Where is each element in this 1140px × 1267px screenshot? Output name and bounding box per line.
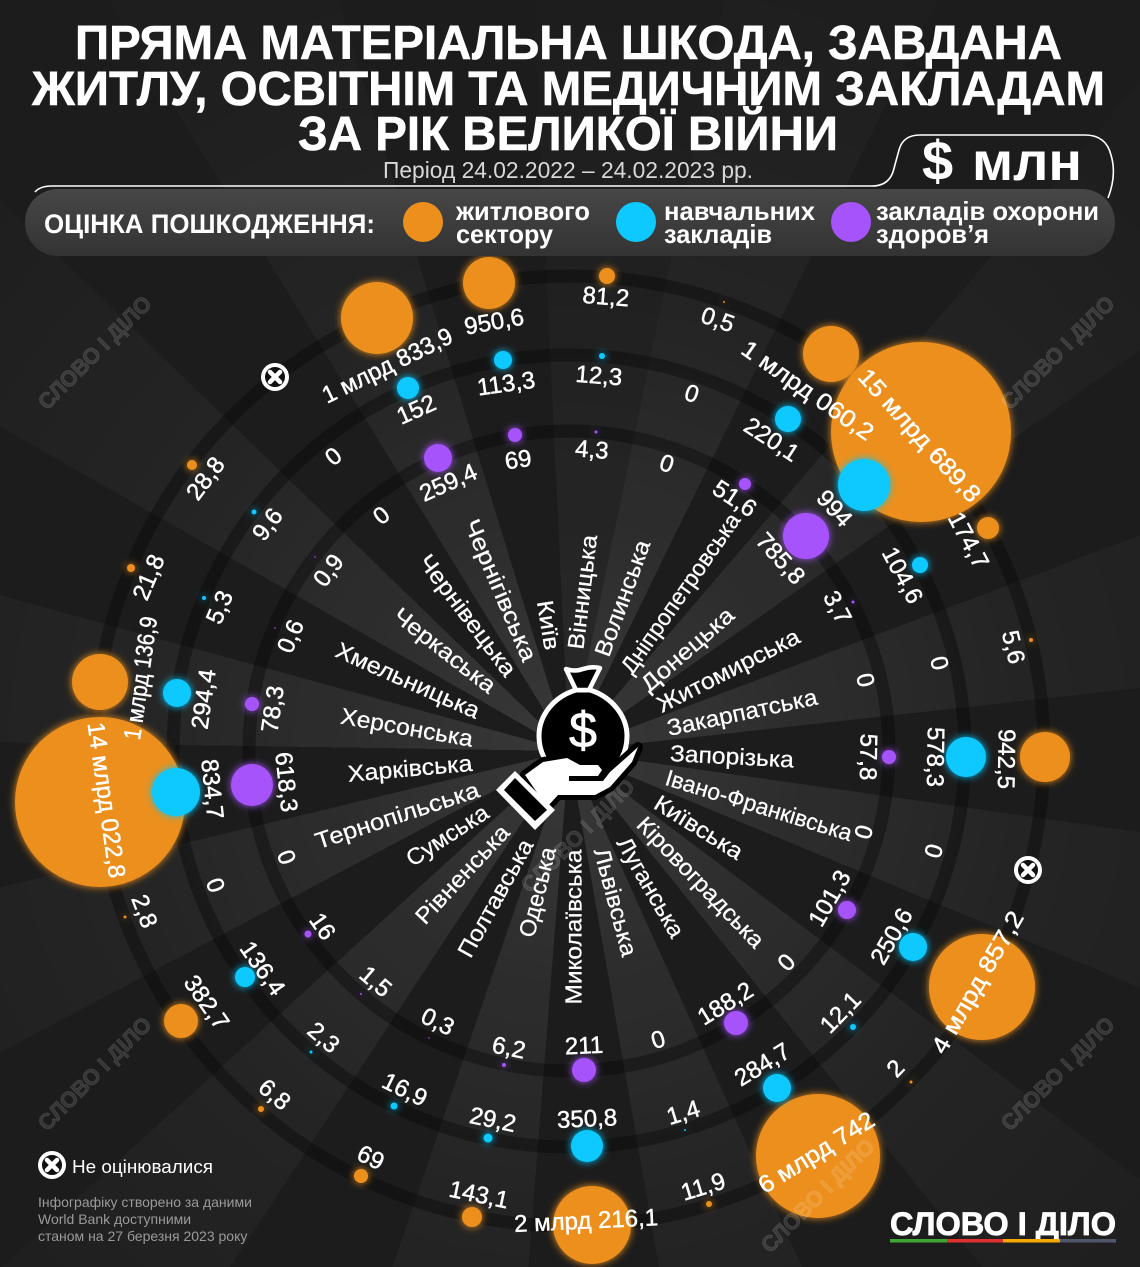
region names: Чернігівська	[459, 515, 542, 665]
watermarks: СЛОВО І ДІЛО	[33, 1012, 157, 1136]
value labels: education: 12,1	[815, 987, 867, 1039]
value labels: education: 1,4	[663, 1095, 703, 1131]
value labels: healthcare: 259,4	[416, 458, 481, 508]
value labels: education: 16,9	[378, 1068, 431, 1112]
region names: Київська	[650, 790, 748, 865]
value labels: education: 5,3	[201, 587, 239, 628]
icon: money bag in hand: $	[569, 702, 597, 758]
value labels: healthcare: 101,3	[803, 866, 857, 931]
value labels: housing: 1 млрд 833,9	[318, 323, 457, 409]
region names: Донецька	[635, 602, 739, 697]
value labels: education: 2,3	[302, 1017, 345, 1059]
value labels: education: 12,3	[575, 361, 623, 391]
value labels: healthcare: 0	[848, 822, 878, 842]
value labels: housing: 950,6	[462, 304, 526, 341]
watermarks: СЛОВО І ДІЛО	[996, 1012, 1120, 1136]
region names: Хмельницька	[332, 637, 484, 724]
legend: housing	[403, 196, 590, 249]
value labels: healthcare: 16	[303, 908, 341, 945]
legend: housing: сектору	[456, 219, 554, 249]
source note: World Bank доступними	[38, 1211, 191, 1227]
period subtitle: Період 24.02.2022 – 24.02.2023 рр.	[383, 157, 753, 183]
value labels: housing: 1 млрд 060,2	[736, 335, 879, 446]
value labels: healthcare: 3,7	[817, 586, 857, 629]
value labels: education: 0	[681, 379, 702, 409]
value labels: housing: 6 млрд 742	[753, 1107, 880, 1199]
value labels: housing: 0,5	[697, 302, 738, 338]
value labels: housing: 21,8	[127, 551, 171, 604]
region names: Черкаська	[388, 602, 501, 698]
value labels: healthcare: 0,9	[308, 549, 350, 592]
value labels: healthcare: 0	[368, 501, 395, 531]
value labels: housing: 69	[353, 1140, 388, 1176]
value labels: education: 578,3	[921, 727, 949, 787]
source note: Інфографіку створено за даними	[38, 1194, 252, 1210]
icon: money bag in hand	[496, 667, 638, 830]
watermarks: СЛОВО І ДІЛО	[33, 291, 157, 415]
value labels: education: 0	[320, 442, 347, 472]
value labels: housing: 2 млрд 216,1	[513, 1204, 659, 1238]
value labels: education: 0	[918, 841, 948, 861]
region names: Рівненська	[410, 819, 515, 929]
value labels: housing: 5,6	[996, 628, 1030, 667]
region names: Харківська	[347, 750, 474, 787]
value labels: healthcare: 0	[850, 671, 880, 690]
region names: Київ	[532, 598, 565, 652]
value labels: education: 113,3	[475, 367, 537, 402]
unit label: $	[922, 129, 953, 192]
value labels: healthcare: 0	[772, 949, 801, 977]
value labels: housing: 1 млрд 136,9	[119, 615, 163, 741]
value labels: education: 0	[924, 654, 954, 673]
value labels: healthcare: 785,8	[750, 527, 810, 590]
region names: Одеська	[514, 844, 561, 940]
region names: Вінницька	[562, 533, 602, 651]
value labels: healthcare: 211	[564, 1032, 604, 1061]
region names: Сумська	[401, 799, 493, 871]
value labels: housing	[82, 282, 1030, 1238]
value labels: housing: 28,8	[181, 452, 231, 505]
value labels: education: 834,7	[195, 758, 228, 820]
region names: Львівська	[589, 845, 643, 959]
region names: Луганська	[611, 832, 690, 942]
value labels: housing: 174,7	[942, 508, 994, 573]
value labels: education: 104,6	[876, 543, 928, 608]
value labels: education: 0	[200, 874, 230, 896]
legend: healthcare	[831, 196, 1099, 249]
region names: Житомирська	[652, 623, 804, 717]
housing sector bubbles	[15, 257, 1070, 1264]
value labels: housing: 143,1	[447, 1176, 511, 1214]
value labels: healthcare: 51,6	[707, 475, 761, 523]
value labels: education	[187, 361, 954, 1138]
legend: not assessed	[40, 1153, 213, 1177]
value labels: housing: 81,2	[582, 282, 630, 312]
region names: Тернопільська	[312, 776, 483, 854]
value labels: healthcare: 57,8	[854, 733, 882, 781]
value labels: healthcare	[257, 435, 882, 1065]
value labels: healthcare: 4,3	[574, 435, 610, 465]
region names: Херсонська	[339, 703, 475, 752]
region names: Кіровоградська	[632, 811, 770, 953]
value labels: housing: 11,9	[678, 1168, 729, 1207]
region names: Івано-Франківська	[662, 764, 856, 846]
watermarks: СЛОВО І ДІЛО	[756, 1134, 880, 1258]
value labels: education: 284,7	[730, 1038, 795, 1092]
value labels: education: 994	[811, 485, 858, 533]
unit tab outline and legend rule	[35, 135, 1113, 198]
region names: Запорізька	[669, 740, 795, 773]
value labels: education: 294,4	[187, 668, 222, 731]
value labels: healthcare: 188,2	[693, 977, 758, 1031]
value labels: healthcare: 69	[503, 445, 533, 475]
region names: Полтавська	[452, 834, 538, 962]
title	[31, 17, 1105, 161]
value labels: healthcare: 0,6	[272, 616, 310, 657]
value labels: housing: 6,8	[253, 1074, 296, 1116]
value labels: housing: 15 млрд 689,8	[852, 364, 986, 508]
value labels: healthcare: 6,2	[490, 1032, 528, 1065]
title: ЖИТЛУ, ОСВІТНІМ ТА МЕДИЧНИМ ЗАКЛАДАМ	[31, 63, 1105, 116]
region names: Волинська	[589, 536, 655, 660]
value labels: education: 152	[393, 390, 440, 431]
value labels: education: 250,6	[865, 904, 919, 969]
value labels: housing: 14 млрд 022,8	[82, 721, 130, 880]
value labels: education: 29,2	[467, 1102, 518, 1138]
radial wedge background	[126, 316, 1010, 1194]
watermarks	[33, 291, 1120, 1258]
value labels: housing: 382,7	[178, 970, 234, 1035]
logo: СЛОВО І ДІЛО	[890, 1206, 1116, 1242]
icon: not assessed (Chernivtsi)	[263, 365, 287, 389]
source note: станом на 27 березня 2023 року	[38, 1228, 247, 1244]
unit label	[922, 129, 1082, 192]
value labels: healthcare: 1,5	[354, 961, 397, 1003]
region names: Чернівецька	[413, 549, 522, 681]
value labels: healthcare: 0	[648, 1025, 669, 1055]
value labels: housing: 2,8	[125, 891, 163, 932]
value labels: education: 9,6	[247, 503, 289, 546]
legend heading: ОЦІНКА ПОШКОДЖЕННЯ:	[44, 209, 375, 239]
region names: Закарпатська	[665, 684, 820, 741]
watermarks: СЛОВО І ДІЛО	[516, 774, 640, 898]
value labels: healthcare: 78,3	[257, 684, 290, 734]
value labels: housing: 2	[881, 1055, 910, 1083]
title: ЗА РІК ВЕЛИКОЇ ВІЙНИ	[298, 106, 838, 161]
legend: housing: житлового	[455, 196, 590, 226]
region names: Миколаївська	[560, 849, 586, 1004]
value labels: healthcare: 0	[271, 846, 301, 868]
legend: healthcare: здоров’я	[876, 219, 989, 249]
region names: Дніпропетровська	[615, 508, 745, 678]
legend: healthcare: закладів охорони	[876, 196, 1099, 226]
title: ПРЯМА МАТЕРІАЛЬНА ШКОДА, ЗАВДАНА	[75, 17, 1062, 70]
watermarks: СЛОВО І ДІЛО	[996, 291, 1120, 415]
legend bar	[25, 189, 1115, 256]
value labels: healthcare: 0	[656, 449, 677, 479]
value labels: housing: 942,5	[992, 729, 1020, 789]
legend: not assessed: Не оцінювалися	[72, 1157, 213, 1177]
value labels: healthcare: 618,3	[269, 751, 302, 813]
value labels: healthcare: 0,3	[417, 1003, 458, 1041]
legend: education: навчальних	[664, 196, 816, 226]
concentric rings	[94, 276, 1044, 1226]
legend: education	[616, 196, 816, 249]
region names	[312, 508, 856, 1004]
value labels: education: 350,8	[556, 1104, 618, 1134]
value labels: education: 220,1	[739, 412, 804, 468]
legend: education: закладів	[664, 219, 772, 249]
icon: not assessed (Ivano-Frankivsk)	[1016, 858, 1040, 882]
value labels: housing: 4 млрд 857,2	[926, 907, 1030, 1059]
value labels: education: 136,4	[234, 936, 290, 1001]
unit label: млн	[972, 132, 1082, 192]
healthcare bubbles	[231, 428, 896, 1082]
education bubbles	[152, 351, 986, 1162]
